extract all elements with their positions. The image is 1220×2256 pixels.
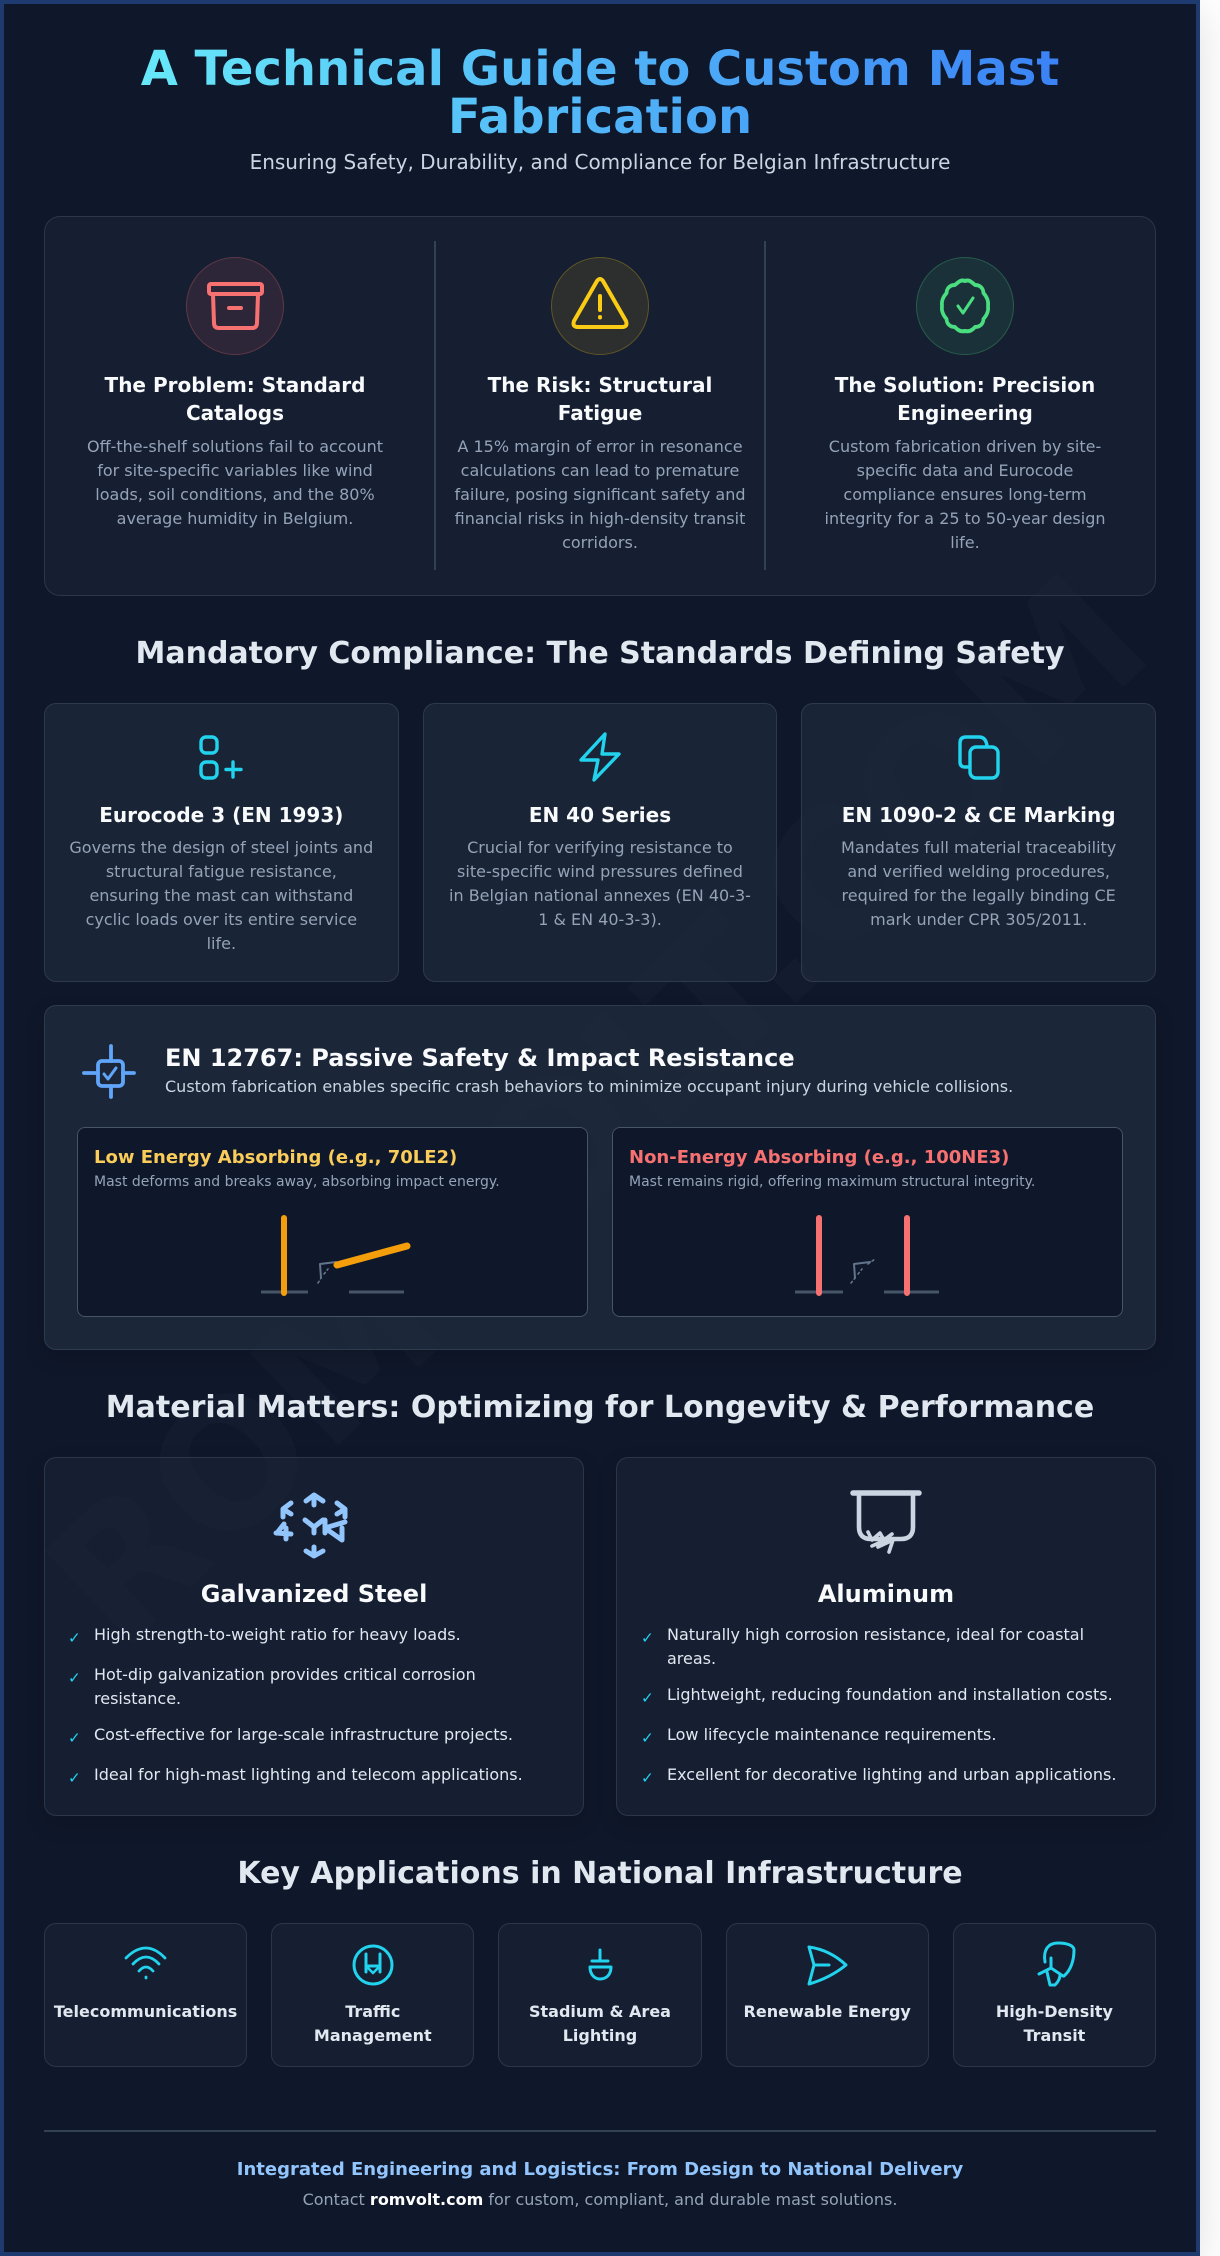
steel benefits list: ✓ [68,1769,81,1787]
risk text: financial risks in high-density transit [455,509,745,528]
steel heading: Galvanized Steel [201,1580,427,1608]
steel benefits list: ✓ [68,1729,81,1747]
title [140,45,1060,141]
icon: crosshair check [82,1044,136,1099]
icon: problem box [186,257,284,355]
low energy text: Mast deforms and breaks away, absorbing impact energy. [94,1174,500,1190]
transit label [996,2002,1113,2045]
card: en 1090 [801,703,1156,982]
aluminum benefits list [641,1625,1116,1787]
sub-card: low energy [77,1127,588,1317]
aluminum benefits list: areas. [667,1649,716,1668]
solution text: specific data and Eurocode [857,461,1073,480]
non energy text: Mast remains rigid, offering maximum structural integrity. [629,1174,1035,1190]
solution text [824,437,1106,552]
en 40 text: 1 & EN 40-3-3). [538,910,662,929]
risk text [454,437,746,552]
risk heading: Fatigue [558,401,642,425]
panel: en 12767 [44,1005,1156,1350]
eurocode text: cyclic loads over its entire service [86,910,357,929]
problem text [87,437,383,528]
eurocode text: structural fatigue resistance, [106,862,337,881]
problem heading [104,373,365,425]
risk heading [488,373,712,425]
steel benefits list: resistance. [94,1689,181,1708]
solution text: compliance ensures long-term [843,485,1087,504]
aluminum benefits list: Lightweight, reducing foundation and installation costs. [667,1685,1113,1704]
icon: copy [958,735,1000,780]
card: renewable energy [726,1923,929,2067]
icon: steel snowflake [274,1492,348,1558]
eurocode heading: Eurocode 3 (EN 1993) [99,803,343,827]
en 1090 text: required for the legally binding CE [842,886,1116,905]
en 12767 subtext: Custom fabrication enables specific crash behaviors to minimize occupant injury during vehicle collisions. [165,1077,1013,1096]
icon: lamp [588,1948,612,1980]
eurocode text: ensuring the mast can withstand [89,886,353,905]
steel benefits list: High strength-to-weight ratio for heavy loads. [94,1625,461,1644]
en 1090 text: Mandates full material traceability [841,838,1116,857]
stadium label: Stadium & Area [529,2002,671,2021]
card: traffic [271,1923,474,2067]
icon: wifi [124,1946,166,1980]
card: telecommunications [44,1923,247,2067]
risk text: calculations can lead to premature [461,461,739,480]
card: galvanized steel [44,1457,584,1816]
problem text: for site-specific variables like wind [97,461,373,480]
solution text: integrity for a 25 to 50-year design [824,509,1106,528]
icon: risk warning [551,257,649,355]
en 40 text: in Belgian national annexes (EN 40-3- [449,886,751,905]
aluminum benefits list: ✓ [641,1729,654,1747]
card: eurocode 3 [44,703,399,982]
diagram: low energy mast [261,1215,410,1296]
icon: send arrow [808,1946,848,1986]
eurocode text: life. [207,934,236,953]
icon: shapes plus [199,735,243,780]
problem heading: The Problem: Standard [105,373,365,397]
steel benefits list: Cost-effective for large-scale infrastructure projects. [94,1725,513,1744]
title: A Technical Guide to Custom Mast [141,41,1059,97]
risk heading: The Risk: Structural [488,373,712,397]
aluminum benefits list: ✓ [641,1689,654,1707]
stadium label [529,2002,671,2045]
heading: material matters: Material Matters: Optimizing for Longevity & Performance [106,1390,1094,1425]
steel benefits list: Ideal for high-mast lighting and telecom applications. [94,1765,523,1784]
aluminum benefits list: Excellent for decorative lighting and urban applications. [667,1765,1116,1784]
traffic label: Traffic [345,2002,400,2021]
steel benefits list: ✓ [68,1629,81,1647]
card: transit [953,1923,1156,2067]
steel benefits list: ✓ [68,1669,81,1687]
aluminum heading: Aluminum [818,1580,954,1608]
problem text: loads, soil conditions, and the 80% [95,485,375,504]
low energy heading: Low Energy Absorbing (e.g., 70LE2) [94,1147,457,1168]
renewable label: Renewable Energy [744,2002,911,2021]
non energy heading: Non-Energy Absorbing (e.g., 100NE3) [629,1147,1009,1168]
solution text: life. [950,533,980,552]
solution heading [834,373,1095,425]
heading: key applications: Key Applications in National Infrastructure [237,1856,963,1891]
watermark: ROMVOLT.COM [8,537,1187,1685]
solution text: Custom fabrication driven by site- [829,437,1101,456]
icon: traffic circle [352,1944,394,1986]
en 1090 text: and verified welding procedures, [847,862,1110,881]
risk text: failure, posing significant safety and [454,485,746,504]
en 40 heading: EN 40 Series [529,803,671,827]
card: aluminum [616,1457,1156,1816]
transit label: Transit [1023,2026,1085,2045]
card: en 40 [423,703,777,982]
aluminum benefits list: Naturally high corrosion resistance, ideal for coastal [667,1625,1084,1644]
aluminum benefits list: Low lifecycle maintenance requirements. [667,1725,996,1744]
aluminum benefits list: ✓ [641,1629,654,1647]
en 12767 heading: EN 12767: Passive Safety & Impact Resistance [165,1044,795,1072]
icon: transit [1037,1942,1076,1986]
panel: problem risk solution [44,216,1156,596]
traffic label [314,2002,432,2045]
sub-card: non energy [612,1127,1123,1317]
subtitle: Ensuring Safety, Durability, and Compliance for Belgian Infrastructure [250,150,950,174]
footer contact: Contact romvolt.com for custom, compliant, and durable mast solutions. [303,2190,897,2209]
footer headline: Integrated Engineering and Logistics: From Design to National Delivery [237,2159,963,2180]
en 40 text [449,838,751,929]
en 1090 heading: EN 1090-2 & CE Marking [842,803,1116,827]
card: stadium [498,1923,702,2067]
en 1090 text [841,838,1116,929]
solution heading: Engineering [897,401,1033,425]
problem text: Off-the-shelf solutions fail to account [87,437,383,456]
solution heading: The Solution: Precision [835,373,1095,397]
icon: solution badge [916,257,1014,355]
en 40 text: Crucial for verifying resistance to [467,838,733,857]
diagram: non energy mast [795,1215,939,1296]
icon: lightning bolt [579,732,621,782]
icon: aluminum cup [850,1490,922,1554]
steel benefits list: Hot-dip galvanization provides critical corrosion [94,1665,476,1684]
problem heading: Catalogs [186,401,284,425]
transit label: High-Density [996,2002,1113,2021]
stadium label: Lighting [563,2026,637,2045]
steel benefits list [68,1625,523,1787]
risk text: A 15% margin of error in resonance [457,437,743,456]
en 40 text: site-specific wind pressures defined [457,862,743,881]
en 1090 text: mark under CPR 305/2011. [870,910,1087,929]
eurocode text [69,838,373,953]
traffic label: Management [314,2026,432,2045]
aluminum benefits list: ✓ [641,1769,654,1787]
title: Fabrication [448,89,752,145]
telecommunications label: Telecommunications [54,2002,237,2021]
risk text: corridors. [562,533,638,552]
problem text: average humidity in Belgium. [117,509,353,528]
eurocode text: Governs the design of steel joints and [69,838,373,857]
heading: mandatory compliance: Mandatory Compliance: The Standards Defining Safety [135,636,1065,671]
